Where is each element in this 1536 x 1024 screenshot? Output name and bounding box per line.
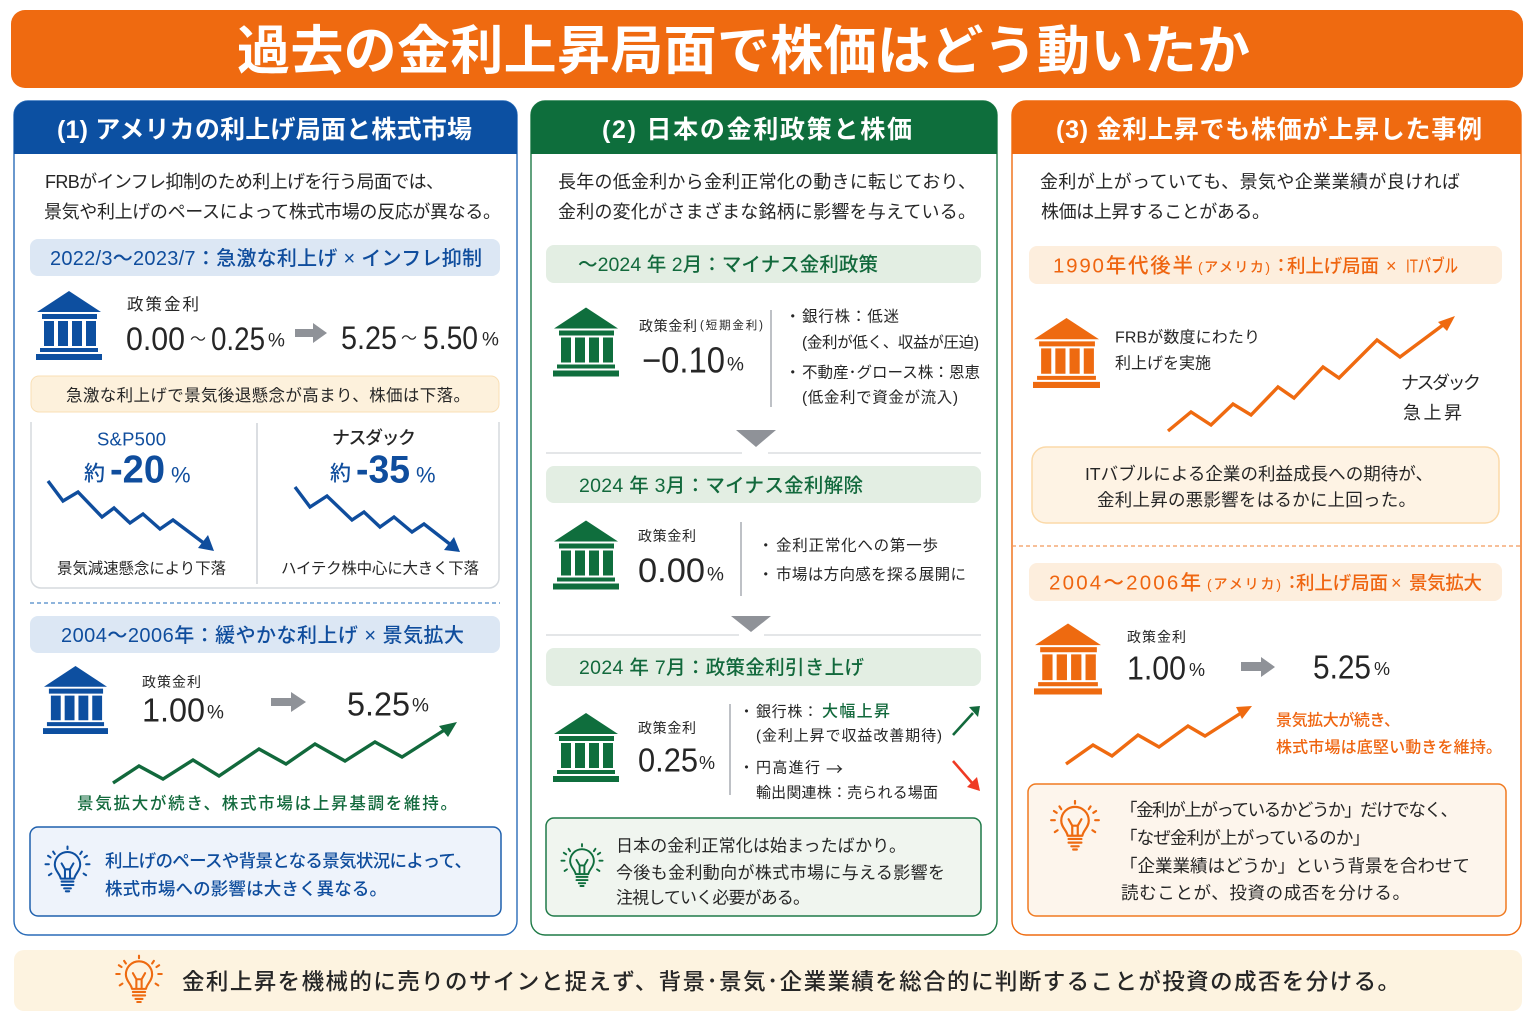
panel header: cases (1012, 101, 1521, 154)
policy rate change: 1.00 (1127, 650, 1186, 686)
period label: 2004-2006: ： (1283, 573, 1301, 593)
policy rate change: % (1374, 659, 1390, 679)
FRB note: 利上げを実施 (1115, 354, 1211, 372)
panel header: Japan (531, 101, 997, 154)
policy rate change 2004: % (412, 696, 429, 716)
S&P500 result (48, 428, 226, 578)
policy rate change 2022: 5.25 (341, 320, 397, 356)
sector effects: negative rates (785, 308, 980, 406)
takeaway box: Japan: 今後も金利動向が株式市場に与える影響を (616, 864, 945, 882)
policy rate change 2022: ～ (190, 332, 206, 348)
icon: bank (553, 308, 619, 376)
sector effects: rate hike: ・ (739, 704, 754, 720)
sector effects: rate hike: 大幅上昇 (822, 702, 890, 720)
panel header: Japan: (2) 日本の金利政策と株価 (602, 116, 912, 144)
icon: bank (43, 666, 108, 734)
panel: (2) Japan rate policy (531, 101, 997, 935)
S&P500 result: 約 (84, 462, 105, 486)
period label: 2004-2006: 利上げ局面 (1296, 572, 1388, 594)
panel: (1) USA rate hikes (14, 101, 517, 935)
arrow: down (736, 430, 776, 447)
sector effects: negative rates: 不動産･グロース株：恩恵 (802, 364, 980, 382)
intro text (44, 172, 501, 222)
Nasdaq result: ハイテク株中心に大きく下落 (281, 560, 479, 578)
panel header: USA (14, 101, 517, 154)
Nasdaq result: 約 (330, 462, 351, 486)
period label: March 2024: 2024 年 3月：マイナス金利解除 (579, 475, 863, 497)
sector effects: rate hike: (金利上昇で収益改善期待) (756, 728, 942, 744)
policy rate 0.25: % (699, 753, 715, 773)
callout: IT bubble: ITバブルによる企業の利益成長への期待が、 (1085, 464, 1433, 484)
icon: bank (36, 291, 102, 360)
policy rate -0.10 (639, 318, 763, 380)
callout: market fall (31, 376, 499, 412)
policy rate change 2022: % (268, 330, 285, 352)
sector effects: rate hike: → (826, 756, 843, 780)
S&P500 result: -20 (110, 448, 165, 492)
orange note: 景気拡大が続き、 (1276, 710, 1400, 730)
title banner: 過去の金利上昇局面で株価はどう動いたか (237, 22, 1250, 81)
period label: 2004-2006 (1029, 563, 1502, 601)
FRB note (1115, 328, 1260, 372)
panel: (3) cases where stocks rose (1012, 101, 1521, 935)
icon: bank (1034, 623, 1102, 695)
Nasdaq result: -35 (356, 448, 410, 492)
policy rate -0.10: −0.10 (642, 340, 725, 380)
intro text: 景気や利上げのペースによって株式市場の反応が異なる。 (44, 202, 501, 222)
takeaway box: USA: 株式市場への影響は大きく異なる。 (105, 879, 387, 899)
takeaway box: cases: 「金利が上がっているかどうか」だけでなく、 (1120, 800, 1458, 820)
sector effects: exit from negative rates: 金利正常化への第一歩 (776, 536, 938, 554)
sector effects: rate hike: 輸出関連株：売られる場面 (756, 784, 938, 802)
Nasdaq result: ナスダック (332, 428, 416, 448)
FRB note: FRBが数度にわたり (1115, 328, 1260, 346)
arrow: down (731, 616, 771, 632)
callout: IT bubble: 金利上昇の悪影響をはるかに上回った。 (1097, 490, 1416, 510)
takeaway box: cases (1028, 784, 1506, 916)
period label: 2004-2006: 2004～2006年 (1049, 572, 1201, 594)
policy rate change 2022: ～ (401, 330, 417, 348)
period label: late 1990s: 1990年代後半 (1053, 254, 1193, 278)
footer conclusion: 金利上昇を機械的に売りのサインと捉えず、背景･景気･企業業績を総合的に判断することが投資の成否を分ける。 (182, 970, 1400, 994)
icon: light bulb (46, 846, 90, 891)
intro text: 株価は上昇することがある。 (1041, 202, 1270, 222)
line chart: Nasdaq surge (1168, 316, 1455, 431)
sector effects: rate hike: 銀行株： (756, 704, 818, 720)
period label: March 2024 (546, 466, 981, 503)
panel header: USA: (1) アメリカの利上げ局面と株式市場 (57, 116, 472, 144)
policy rate change 2004: 1.00 (142, 692, 205, 728)
Nasdaq note: 急上昇 (1403, 403, 1462, 423)
policy rate change: 5.25 (1313, 648, 1371, 686)
Nasdaq result: % (416, 462, 436, 488)
period label: late 1990s: (アメリカ) (1198, 259, 1270, 275)
Nasdaq note: ナスダック (1401, 373, 1481, 393)
policy rate 0.25: 0.25 (638, 742, 698, 778)
Nasdaq note (1401, 373, 1481, 423)
intro text: 金利の変化がさまざまな銘柄に影響を与えている。 (558, 201, 976, 222)
intro text (1040, 172, 1460, 222)
footer conclusion (14, 950, 1522, 1011)
period label: July 2024: 2024 年 7月：政策金利引き上げ (579, 657, 864, 679)
takeaway box: cases: 「企業業績はどうか」という背景を合わせて (1120, 856, 1470, 876)
policy rate 0.25: 政策金利 (638, 720, 696, 736)
title banner (11, 10, 1523, 88)
policy rate change 2022: 0.25 (211, 321, 265, 357)
panel header: cases: (3) 金利上昇でも株価が上昇した事例 (1056, 115, 1482, 144)
intro text: FRBがインフレ抑制のため利上げを行う局面では、 (45, 172, 444, 192)
period label: until Feb 2024 (546, 245, 981, 283)
policy rate -0.10: 政策金利 (639, 318, 697, 334)
intro text (558, 172, 976, 222)
Nasdaq result (281, 428, 479, 578)
icon: bank (1033, 318, 1100, 388)
orange note: 株式市場は底堅い動きを維持。 (1276, 738, 1502, 756)
callout: market fall: 急激な利上げで景気後退懸念が高まり、株価は下落。 (66, 386, 470, 405)
S&P500 result: % (171, 462, 191, 488)
policy rate change: % (1189, 660, 1205, 680)
policy rate change 2004 (142, 674, 429, 728)
policy rate change 2022: 政策金利 (127, 295, 199, 314)
line chart: steady market (1066, 706, 1252, 764)
intro text: 金利が上がっていても、景気や企業業績が良ければ (1040, 172, 1460, 192)
policy rate 0.25 (638, 720, 715, 778)
sector effects: negative rates: ・ (785, 364, 801, 382)
S&P500 result: 景気減速懸念により下落 (57, 560, 226, 578)
sector effects: negative rates: 銀行株：低迷 (802, 308, 899, 326)
S&P500 result: S&P500 (97, 428, 166, 450)
period label 2022-2023 (30, 239, 500, 276)
period label: 2004-2006: × (1391, 573, 1402, 593)
policy rate change (1127, 629, 1390, 686)
policy rate -0.10: % (727, 354, 744, 376)
period label: late 1990s (1029, 246, 1502, 284)
policy rate change 2004: 政策金利 (142, 674, 201, 690)
policy rate change 2022: 0.00 (126, 321, 185, 357)
period label: 2004-2006: (アメリカ) (1207, 576, 1281, 592)
icon: bank (553, 713, 619, 782)
sector effects: rate hike (739, 702, 942, 802)
takeaway box: USA (30, 827, 501, 916)
policy rate -0.10: (短期金利) (700, 319, 763, 332)
period label: late 1990s: ITバブル (1406, 256, 1458, 276)
policy rate change 2022: % (482, 330, 499, 350)
orange note (1276, 710, 1502, 756)
arrow: green up (953, 706, 980, 735)
period label: late 1990s: ： (1272, 256, 1290, 276)
policy rate change 2004: % (207, 702, 224, 724)
icon: light bulb (1051, 801, 1099, 850)
sector effects: exit from negative rates: ・ (758, 566, 774, 584)
icon: light bulb (116, 956, 162, 1002)
policy rate change: 政策金利 (1127, 629, 1186, 645)
takeaway box: Japan: 日本の金利正常化は始まったばかり。 (616, 836, 906, 856)
takeaway box: cases: 読むことが、投資の成否を分ける。 (1121, 883, 1410, 903)
policy rate change 2004: 5.25 (347, 686, 410, 722)
sector effects: negative rates: (金利が低く、収益が圧迫) (802, 334, 979, 352)
policy rate 0.00 (638, 528, 724, 590)
sector effects: exit from negative rates: 市場は方向感を探る展開に (776, 566, 966, 584)
callout: IT bubble (1032, 447, 1499, 523)
arrow: red down (953, 761, 980, 791)
policy rate change 2022: 5.50 (423, 320, 478, 356)
sector effects: negative rates: (低金利で資金が流入) (802, 388, 958, 406)
period label: late 1990s: 利上げ局面 (1287, 256, 1379, 276)
takeaway box: Japan: 注視していく必要がある。 (616, 888, 810, 908)
period label: July 2024 (546, 648, 981, 686)
policy rate change 2022 (126, 295, 499, 357)
sector effects: rate hike: ・ (739, 760, 754, 776)
takeaway box: cases: 「なぜ金利が上がっているのか」 (1120, 828, 1370, 848)
icon: bank (553, 520, 619, 590)
period label: late 1990s: × (1386, 256, 1397, 276)
sector effects: negative rates: ・ (785, 308, 801, 326)
comparison box: S&P500 and Nasdaq (31, 422, 499, 588)
takeaway box: Japan (546, 818, 981, 916)
sector effects: exit from negative rates: ・ (758, 538, 774, 554)
policy rate 0.00: % (707, 564, 724, 586)
sector effects: exit from negative rates (758, 536, 966, 584)
period label 2004-2006: 2004～2006年：緩やかな利上げ × 景気拡大 (61, 624, 464, 647)
intro text: 長年の低金利から金利正常化の動きに転じており、 (558, 172, 976, 192)
green note: 景気拡大が続き、株式市場は上昇基調を維持。 (77, 793, 457, 813)
icon: light bulb (561, 844, 603, 886)
policy rate 0.00: 0.00 (638, 552, 705, 590)
period label 2022-2023: 2022/3～2023/7：急激な利上げ × インフレ抑制 (50, 247, 482, 270)
period label: until Feb 2024: ～2024 年 2月：マイナス金利政策 (578, 254, 878, 276)
period label: 2004-2006: 景気拡大 (1409, 572, 1482, 594)
period label 2004-2006 (30, 616, 500, 653)
sector effects: rate hike: 円高進行 (756, 760, 820, 776)
line chart: rising market (113, 722, 457, 783)
policy rate 0.00: 政策金利 (638, 528, 696, 544)
takeaway box: USA: 利上げのペースや背景となる景気状況によって、 (105, 851, 472, 871)
